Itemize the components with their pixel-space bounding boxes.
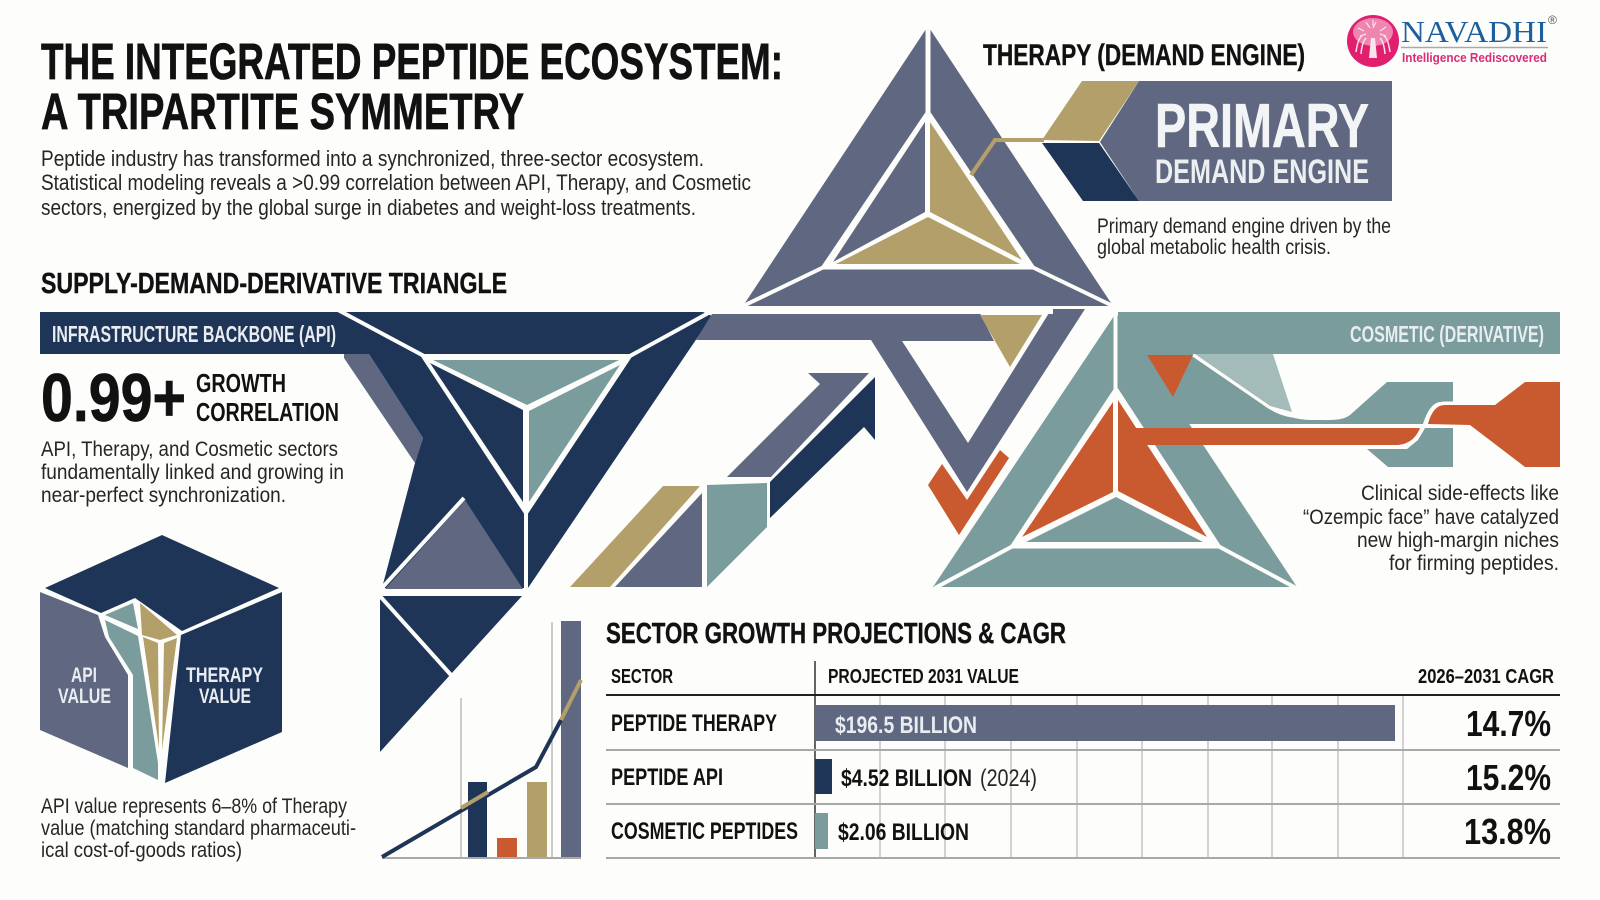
therapy description text: Primary demand engine driven by the xyxy=(1097,215,1391,238)
API description text: near-perfect synchronization. xyxy=(41,484,286,507)
lower navy triangle xyxy=(380,596,522,752)
panel: sector growth table xyxy=(606,618,1560,858)
row: peptide API: 15.2% xyxy=(1466,757,1551,798)
therapy description text: global metabolic health crisis. xyxy=(1097,236,1331,259)
title: A TRIPARTITE SYMMETRY xyxy=(41,83,524,140)
row: peptide therapy xyxy=(611,703,1551,744)
heading: therapy: THERAPY (DEMAND ENGINE) xyxy=(983,39,1305,72)
cube description text xyxy=(41,795,356,862)
panel: primary demand engine xyxy=(971,81,1392,201)
cube description text: API value represents 6–8% of Therapy xyxy=(41,795,347,818)
white facet lines xyxy=(338,310,712,590)
row: peptide therapy: PEPTIDE THERAPY xyxy=(611,710,777,737)
logo: Navadhi: NAVADHI xyxy=(1401,14,1547,49)
logo: Navadhi: ® xyxy=(1548,13,1557,27)
API banner label: INFRASTRUCTURE BACKBONE (API) xyxy=(52,321,336,347)
API description text: API, Therapy, and Cosmetic sectors xyxy=(41,438,338,461)
row: peptide API xyxy=(611,757,1551,798)
API description text xyxy=(41,438,344,507)
panel: API navy triangle xyxy=(40,310,712,752)
row: cosmetic peptides: 13.8% xyxy=(1464,811,1551,852)
cosmetic description text xyxy=(1303,482,1559,575)
stat: 0.99+ growth correlation: GROWTH xyxy=(196,368,286,398)
panel: primary demand engine: PRIMARY xyxy=(1155,92,1369,161)
gold and slate inner facets xyxy=(833,122,925,262)
navy left facet xyxy=(430,363,523,502)
logo: Navadhi: Intelligence Rediscovered xyxy=(1402,50,1547,65)
orange chevron xyxy=(928,450,1009,535)
panel: cosmetic triangle xyxy=(933,312,1560,588)
cube description text: ical cost-of-goods ratios) xyxy=(41,839,242,862)
orange inner facets xyxy=(1013,390,1218,546)
navy banner and triangle body xyxy=(40,312,712,588)
gold wedge xyxy=(980,315,1042,367)
cube labels: THERAPY xyxy=(186,664,263,687)
cube labels: API xyxy=(71,664,97,687)
cosmetic description text: Clinical side-effects like xyxy=(1361,482,1559,505)
table header row xyxy=(611,666,1554,688)
connector line xyxy=(971,140,1044,175)
slate outer triangle xyxy=(743,26,1113,306)
light teal wedge xyxy=(1195,354,1292,412)
slate lower facet xyxy=(385,500,523,589)
panel: primary demand engine: DEMAND ENGINE xyxy=(1155,153,1369,191)
row: peptide API: $4.52 BILLION xyxy=(841,765,972,792)
title xyxy=(41,33,783,140)
table header row: PROJECTED 2031 VALUE xyxy=(828,666,1019,688)
arrow: rising multicolor arrow xyxy=(570,373,875,587)
white bar top line xyxy=(1192,424,1467,428)
cube labels xyxy=(58,664,263,708)
cube description text: value (matching standard pharmaceuti- xyxy=(41,817,356,840)
cube labels: VALUE xyxy=(58,685,111,708)
row: cosmetic peptides xyxy=(611,811,1551,852)
API description text: fundamentally linked and growing in xyxy=(41,461,344,484)
teal flow shape xyxy=(1118,354,1453,424)
row: peptide API: PEPTIDE API xyxy=(611,764,723,791)
teal right facet xyxy=(529,365,620,502)
heading: supply-demand-derivative triangle: SUPPLY-DEMAND-DERIVATIVE TRIANGLE xyxy=(41,268,507,300)
panel: therapy triangle xyxy=(696,26,1115,535)
cosmetic description text: “Ozempic face” have catalyzed xyxy=(1303,506,1559,529)
table heading: SECTOR GROWTH PROJECTIONS & CAGR xyxy=(606,618,1066,650)
row: cosmetic peptides: COSMETIC PEPTIDES xyxy=(611,818,798,845)
table header row: SECTOR xyxy=(611,666,673,688)
intro text block: sectors, energized by the global surge in diabetes and weight-loss treatments. xyxy=(41,195,696,220)
row: peptide therapy: $196.5 BILLION xyxy=(835,712,977,739)
orange connector bar xyxy=(1135,428,1420,445)
row: peptide therapy: 14.7% xyxy=(1466,703,1551,744)
teal outer triangle xyxy=(933,313,1297,587)
grid lines xyxy=(880,695,1403,858)
orange small triangle xyxy=(1147,355,1193,397)
lower teal connector xyxy=(1367,428,1453,467)
cube labels: VALUE xyxy=(199,685,251,708)
stat: 0.99+ growth correlation xyxy=(41,360,339,436)
slate side strip xyxy=(344,354,423,463)
table header row: 2026–2031 CAGR xyxy=(1418,666,1554,688)
icon: pink tree seal xyxy=(1347,15,1399,67)
orange right flow xyxy=(1428,382,1560,467)
cosmetic description text: for firming peptides. xyxy=(1389,552,1559,575)
stat: 0.99+ growth correlation: CORRELATION xyxy=(196,397,339,427)
icon: value cube xyxy=(40,535,282,783)
intro text block: Peptide industry has transformed into a synchronized, three-sector ecosystem. xyxy=(41,146,704,171)
row: peptide API: (2024) xyxy=(980,765,1037,792)
intro text block xyxy=(41,146,751,220)
teal top facet xyxy=(433,360,619,405)
cosmetic banner xyxy=(1118,312,1560,354)
cosmetic description text: new high-margin niches xyxy=(1357,529,1559,552)
chart: bars and growth line xyxy=(382,621,581,858)
title: THE INTEGRATED PEPTIDE ECOSYSTEM: xyxy=(41,33,783,90)
stat: 0.99+ growth correlation: 0.99+ xyxy=(41,360,186,436)
slate V band xyxy=(696,309,1085,492)
intro text block: Statistical modeling reveals a >0.99 correlation between API, Therapy, and Cosmetic xyxy=(41,170,751,195)
logo: Navadhi xyxy=(1347,13,1557,67)
therapy description text xyxy=(1097,215,1391,259)
row: cosmetic peptides: $2.06 BILLION xyxy=(838,819,969,846)
